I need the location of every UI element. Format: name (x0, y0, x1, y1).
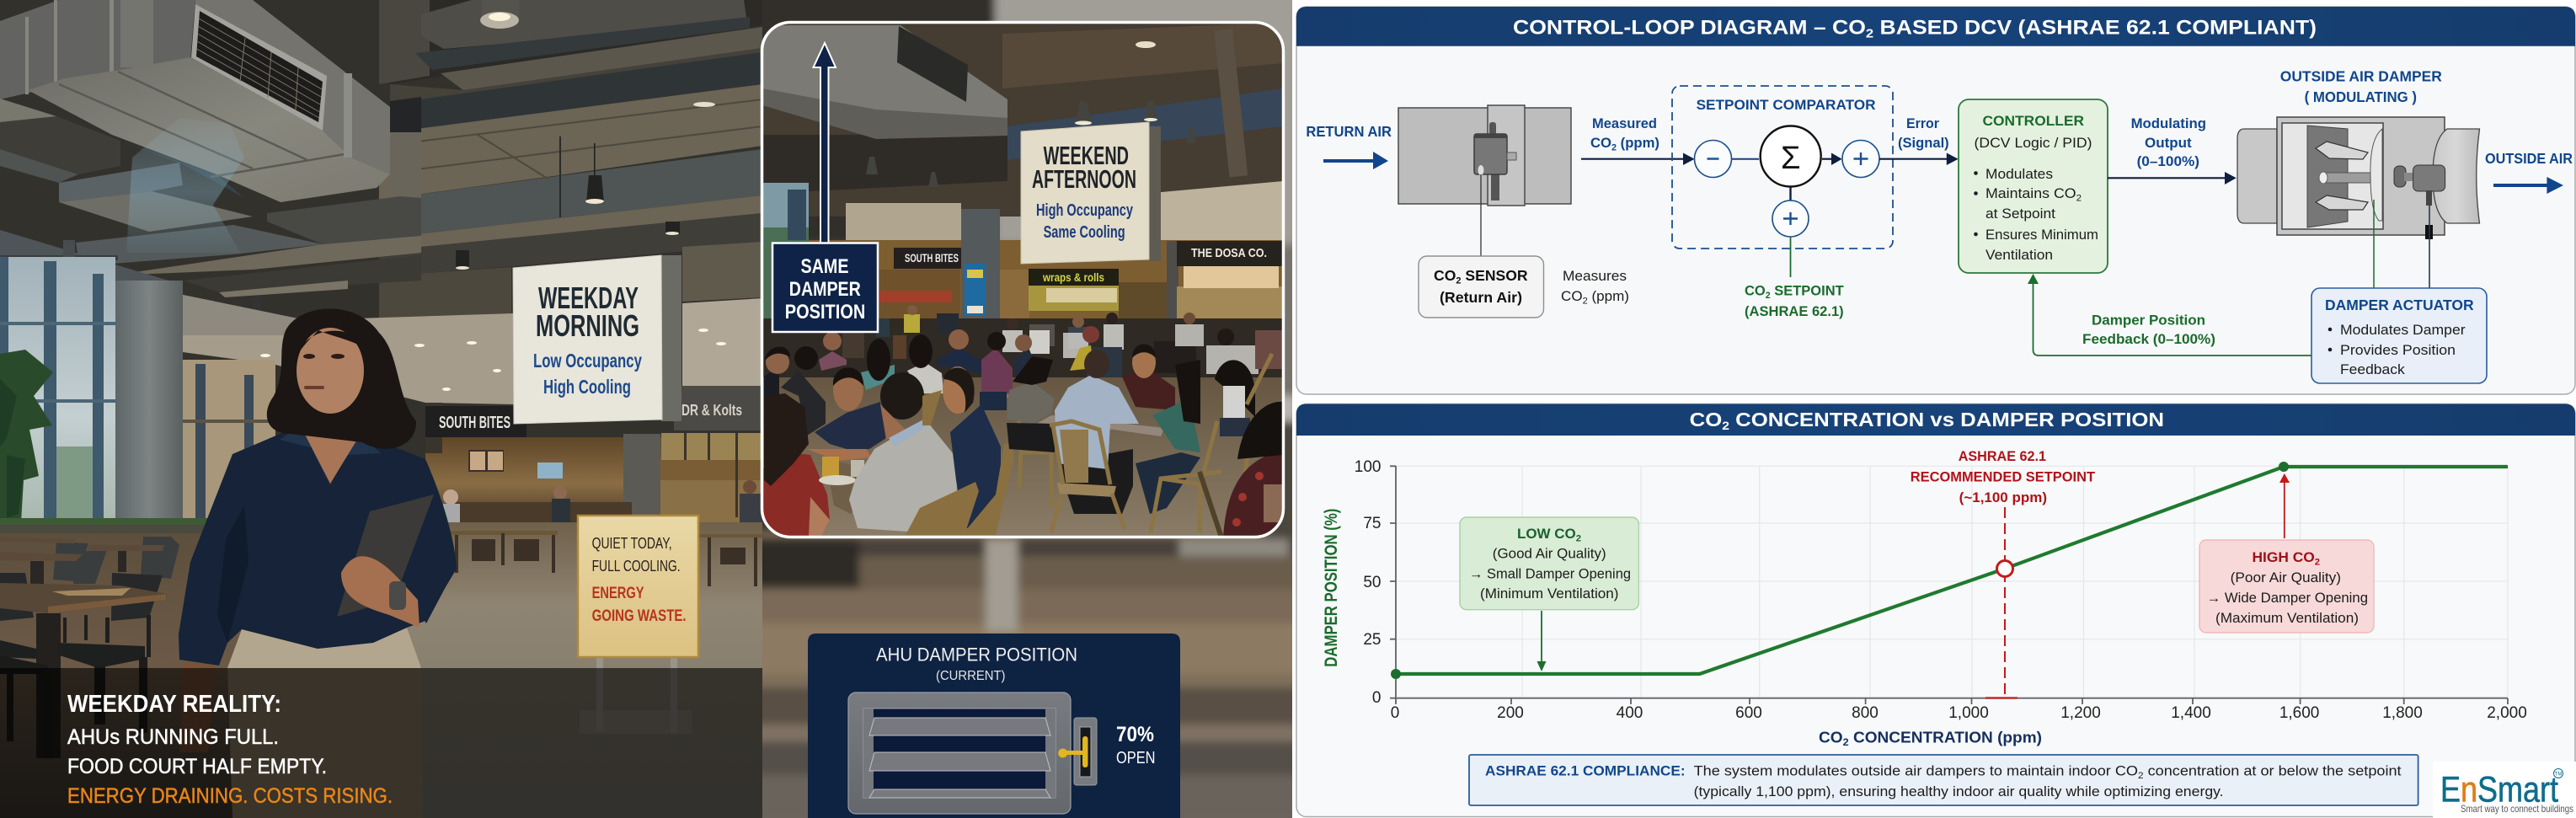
sign band: South Bites (425, 406, 526, 437)
sign: weekend afternoon: WEEKEND (1044, 141, 1129, 170)
label: error signal: Error (1906, 115, 1939, 131)
arrow: sum to plus (1822, 153, 1842, 165)
end point (2279, 462, 2289, 472)
sign: quiet today: FULL COOLING. (592, 557, 681, 575)
logo: EnSmart: EnSmart (2440, 770, 2558, 810)
man in light blue shirt (1055, 350, 1139, 514)
sign: weekday morning (513, 255, 681, 424)
callout: high CO2: → Wide Damper Opening (2207, 591, 2368, 606)
label: return air: RETURN AIR (1306, 123, 1392, 140)
chart title: CO (1690, 409, 1718, 430)
y tick labels: 0 (1372, 689, 1382, 707)
woman in patterned top (1007, 356, 1055, 508)
duct right face (192, 0, 390, 174)
shirt (179, 425, 457, 666)
label: same damper position: DAMPER (789, 278, 861, 301)
gold chair centre (1050, 421, 1125, 532)
callout: compliance note (1469, 755, 2418, 805)
sign: weekend afternoon: AFTERNOON (1032, 164, 1136, 194)
box: controller: Maintains CO (1985, 185, 2072, 201)
note: measures CO2 (1561, 268, 1629, 307)
label: damper position feedback: Damper Position (2092, 313, 2205, 329)
gold chairs far right (1245, 354, 1272, 472)
y tick labels: 75 (1363, 515, 1382, 532)
note: measures CO2: 2 (1583, 297, 1588, 307)
left ceiling (267, 194, 421, 244)
sign: quiet today: QUIET TODAY, (592, 534, 672, 552)
plant (0, 350, 53, 522)
callout: compliance note: The system modulates outside air dampers to maintain indoor CO (1694, 763, 2111, 779)
woman in teal (1136, 360, 1200, 514)
arrow: damper position feedback (2028, 274, 2311, 356)
box: CO2 sensor: SENSOR (1462, 267, 1528, 284)
man in navy polo (807, 367, 886, 461)
arrow: measured signal (1581, 153, 1695, 165)
label: measured CO2: Measured (1592, 115, 1657, 131)
inset floor (762, 333, 1283, 539)
label: measured CO2 (1590, 115, 1659, 153)
callout: compliance note: concentration at or below the setpoint (2144, 763, 2402, 779)
chart title: 2 (1722, 419, 1729, 432)
gold chair right (1151, 421, 1221, 532)
x tick labels: 2,000 (2487, 704, 2527, 722)
floor (0, 522, 762, 818)
header bar (1296, 404, 2575, 436)
label: error signal: (Signal) (1898, 135, 1949, 151)
callout: low CO2: LOW CO (1517, 527, 1574, 542)
photo: weekday morning food court (0, 0, 762, 818)
panel: control-loop diagram (1296, 7, 2575, 394)
inset frame (762, 22, 1284, 537)
inset photo: weekend afternoon crowd (762, 22, 1284, 539)
window base and planting (0, 518, 211, 533)
arrow: output to damper (2108, 172, 2237, 184)
far tables (0, 531, 762, 586)
callout: low CO2 (1460, 517, 1638, 610)
chart title: CONCENTRATION vs DAMPER POSITION (1729, 409, 2164, 430)
box: controller: Modulates (1985, 166, 2053, 182)
note: measures CO2: (ppm) (1588, 288, 1629, 304)
sign: weekend afternoon: Same Cooling (1044, 223, 1125, 242)
sign band: Dr &amp; Kolts: DR & Kolts (681, 402, 742, 419)
x tick labels (1391, 704, 2527, 722)
box: controller: Ensures Minimum (1985, 227, 2098, 243)
hair (267, 308, 416, 449)
x axis title: CO (1819, 730, 1841, 746)
lines: actuator links (2374, 200, 2429, 288)
duct upper side (0, 0, 195, 99)
callout: high CO2: (Poor Air Quality) (2231, 570, 2341, 585)
woman in white (1215, 360, 1255, 436)
sign: weekday morning: WEEKDAY (538, 281, 639, 315)
inset blue poster (965, 264, 986, 316)
lit lower ceiling (183, 295, 762, 404)
label: damper position feedback (2082, 313, 2215, 347)
callout: compliance note: (typically 1,100 ppm), ensuring healthy indoor air quality while optimizing energy. (1694, 783, 2224, 799)
box: CO2 sensor: CO (1434, 267, 1456, 284)
caption band: FOOD COURT HALF EMPTY. (67, 755, 327, 778)
caption band: AHUs RUNNING FULL. (67, 725, 279, 749)
label: modulating output (2131, 115, 2206, 169)
man in dark red shirt (1122, 344, 1175, 410)
value: 70 percent open: OPEN (1116, 749, 1156, 767)
diagram title: CONTROL-LOOP DIAGRAM – CO (1513, 17, 1831, 39)
trousers (227, 668, 337, 818)
icon: outside air damper (2237, 117, 2480, 239)
label: CO2 setpoint: SETPOINT (1771, 283, 1844, 299)
x tick labels: 1,800 (2382, 704, 2423, 722)
x tick labels: 800 (1852, 704, 1879, 722)
y tick labels: 100 (1355, 458, 1382, 476)
label: modulating output: Modulating (2131, 115, 2206, 131)
start point (1391, 669, 1401, 679)
summing node: Σ (1781, 141, 1800, 176)
box: damper actuator: Provides Position (2340, 342, 2456, 358)
label: damper position feedback: Feedback (0–100%) (2082, 331, 2215, 347)
note: measures CO2: CO (1561, 288, 1582, 304)
icon: actuator handle (1058, 718, 1097, 785)
box: setpoint comparator (1672, 86, 1893, 249)
label: CO2 setpoint: (ASHRAE 62.1) (1745, 303, 1844, 319)
label: outside air damper: ( MODULATING ) (2305, 88, 2417, 105)
arrow: up to duct (814, 43, 836, 243)
note: measures CO2: Measures (1563, 268, 1627, 284)
woman bottom right (1200, 402, 1283, 537)
woman with tablet (179, 308, 457, 818)
face (297, 328, 364, 414)
callout: high CO2: (Maximum Ventilation) (2215, 611, 2359, 626)
sign: quiet today (578, 516, 698, 734)
arrow: low CO2 (1537, 611, 1547, 671)
plus node right (1842, 140, 1879, 177)
secondary duct (59, 163, 183, 202)
diagram title: 2 (1866, 27, 1873, 40)
ceiling lights (63, 12, 715, 270)
air light rays (126, 118, 244, 253)
x tick labels: 0 (1391, 704, 1399, 722)
box: setpoint comparator: SETPOINT COMPARATOR (1697, 97, 1876, 113)
sign: weekday morning: MORNING (536, 308, 639, 343)
caption band (0, 668, 762, 818)
sign: weekday morning: High Cooling (543, 376, 631, 398)
left forearm (179, 661, 215, 752)
label: measured CO2: 2 (1611, 143, 1617, 153)
label: same damper position: SAME (800, 255, 849, 278)
diagram title: BASED DCV (ASHRAE 62.1 COMPLIANT) (1873, 17, 2317, 39)
box: controller: (DCV Logic / PID) (1975, 135, 2092, 151)
value: 70 percent open: 70% (1116, 723, 1154, 746)
arrow: error to controller (1879, 153, 1959, 165)
box: damper actuator (2311, 288, 2487, 383)
label: ASHRAE setpoint: (~1,100 ppm) (1959, 490, 2047, 505)
woman in red (762, 393, 830, 537)
label: CO2 setpoint (1745, 283, 1844, 319)
wire: sensor lead (1480, 174, 1482, 256)
label: CO2 setpoint: CO (1745, 283, 1766, 299)
panel title: AHU DAMPER POSITION (876, 644, 1077, 666)
column (115, 281, 183, 522)
box: damper actuator: Feedback (2340, 361, 2405, 377)
callout: high CO2: HIGH CO (2253, 549, 2313, 565)
logo: EnSmart: TM (2555, 772, 2562, 777)
callout: low CO2: (Minimum Ventilation) (1480, 586, 1619, 601)
duct rails (59, 72, 350, 177)
x tick labels: 1,000 (1948, 704, 1989, 722)
tablet (337, 495, 434, 617)
label: modulating output: (0–100%) (2137, 153, 2199, 169)
label: measured CO2: CO (1590, 135, 1612, 151)
box: controller: CONTROLLER (1983, 113, 2084, 129)
mid-row diners (764, 326, 1099, 436)
y tick labels: 25 (1363, 631, 1382, 649)
x axis title: 2 (1843, 736, 1849, 748)
icon: return air duct with sensor (1398, 105, 1571, 206)
y axis title: DAMPER POSITION (%) (1322, 509, 1341, 667)
sign band: Dr &amp; Kolts (674, 386, 762, 430)
box: controller: 2 (2076, 194, 2082, 204)
sign band: South Bites: SOUTH BITES (439, 414, 510, 432)
arrow: return air in (1323, 152, 1388, 169)
duct underside (28, 57, 390, 202)
y tick labels (1355, 458, 1382, 707)
callout: compliance note: 2 (2138, 771, 2144, 781)
callout: low CO2: 2 (1576, 534, 1581, 544)
man in gray shirt (849, 372, 958, 535)
ceiling (0, 0, 762, 539)
shirt shading (217, 505, 249, 643)
label: outside air damper: OUTSIDE AIR DAMPER (2280, 68, 2442, 85)
white gutter right of photo (1292, 0, 2576, 818)
inset ductwork (762, 25, 1007, 139)
near table (826, 459, 906, 514)
label: measured CO2: (ppm) (1617, 135, 1659, 151)
x axis title: CONCENTRATION (ppm) (1849, 730, 2042, 746)
sign: weekday morning: Low Occupancy (533, 350, 642, 372)
summing node (1761, 126, 1821, 187)
label: error signal (1898, 115, 1949, 151)
sign: quiet today: ENERGY (592, 585, 644, 602)
header bar (1296, 7, 2575, 46)
axes (1390, 466, 2508, 704)
callout: low CO2: (Good Air Quality) (1493, 547, 1606, 562)
label: outside air damper (2280, 68, 2442, 105)
inset windows (762, 183, 809, 334)
label: CO2 setpoint: 2 (1766, 291, 1771, 301)
shop sign: The Dosa Co (1177, 241, 1283, 266)
callout: compliance note: ASHRAE 62.1 COMPLIANCE: (1485, 763, 1686, 779)
inset ceiling (762, 23, 1283, 244)
callout: low CO2: → Small Damper Opening (1469, 567, 1631, 582)
photo: blurred background extension (750, 0, 1306, 818)
watch (389, 581, 406, 610)
grid (1396, 466, 2508, 698)
hand and forearm (341, 556, 420, 628)
grille frame (191, 4, 327, 131)
callout: high CO2: 2 (2315, 558, 2320, 568)
box: damper actuator: DAMPER ACTUATOR (2325, 297, 2474, 313)
x tick labels: 1,400 (2171, 704, 2211, 722)
background crowd (762, 305, 1283, 377)
panel subtitle: (CURRENT) (936, 669, 1006, 683)
box: controller: at Setpoint (1985, 206, 2055, 222)
label: same damper position: POSITION (785, 301, 865, 323)
connector lines (1732, 159, 1791, 200)
eyes and mouth (303, 354, 345, 389)
shop sign: The Dosa Co: THE DOSA CO. (1191, 246, 1267, 260)
box: CO2 sensor: 2 (1456, 276, 1462, 286)
response curve (1396, 467, 2508, 674)
structural ceiling lines (390, 99, 762, 179)
label: ASHRAE setpoint (1911, 449, 2095, 505)
label: same damper position (772, 243, 878, 332)
shop sign: wraps and rolls (1029, 269, 1119, 286)
chart: damper position curve (1322, 449, 2527, 748)
neck (305, 436, 355, 484)
setpoint point (1996, 561, 2013, 576)
caption band: WEEKDAY REALITY: (67, 691, 281, 718)
box: controller (1959, 99, 2108, 273)
shop sign: South Bites (894, 248, 961, 269)
storefront glazing (183, 360, 275, 521)
ductwork with grille (0, 0, 390, 253)
right sleeve (425, 566, 457, 623)
shop interiors (425, 403, 762, 522)
x tick labels: 1,600 (2279, 704, 2319, 722)
far table (1036, 415, 1164, 436)
sign: quiet today: GOING WASTE. (592, 607, 687, 625)
round duct collar (120, 0, 153, 67)
arrow: high CO2 (2279, 473, 2290, 538)
value: 70 percent open (1116, 723, 1156, 767)
label: ASHRAE setpoint: ASHRAE 62.1 (1959, 449, 2046, 464)
box: CO2 sensor (1419, 256, 1543, 318)
arrow: outside air out (2493, 177, 2563, 194)
x tick labels: 200 (1497, 704, 1524, 722)
logo: EnSmart (2433, 762, 2576, 818)
line: setpoint feed (1789, 237, 1791, 277)
lower left duct (0, 99, 56, 122)
shop sign: South Bites: SOUTH BITES (905, 251, 959, 265)
sign: weekend afternoon: High Occupancy (1036, 201, 1134, 220)
minus node (1695, 140, 1732, 177)
callout: high CO2 (2199, 540, 2374, 633)
shop sign: wraps and rolls: wraps & rolls (1042, 270, 1104, 284)
icon: louvre damper (848, 692, 1071, 814)
panel: CO2 concentration vs damper position (1296, 404, 2575, 817)
panel: AHU damper position (808, 634, 1180, 818)
sign: weekend afternoon (1021, 122, 1161, 264)
plus node bottom (1772, 200, 1809, 237)
setpoint marker line (1985, 507, 2018, 698)
grille slats (196, 11, 323, 122)
box: controller: Ventilation (1985, 247, 2053, 263)
inset shopfronts (809, 209, 1283, 334)
label: ASHRAE setpoint: RECOMMENDED SETPOINT (1911, 470, 2095, 485)
label: modulating output: Output (2145, 135, 2192, 151)
y tick labels: 50 (1363, 574, 1382, 591)
box: CO2 sensor: (Return Air) (1440, 289, 1522, 306)
caption band: ENERGY DRAINING. COSTS RISING. (67, 784, 393, 808)
inset lamps (866, 41, 1196, 187)
near table and chairs (0, 573, 167, 758)
window wall (0, 257, 115, 522)
x tick labels: 1,200 (2060, 704, 2101, 722)
box: damper actuator: Modulates Damper (2340, 322, 2466, 338)
gold chairs front (906, 390, 1013, 535)
man in navy shirt (943, 366, 1001, 528)
glass and plates (819, 457, 864, 485)
x tick labels: 600 (1735, 704, 1762, 722)
x tick labels: 400 (1617, 704, 1643, 722)
